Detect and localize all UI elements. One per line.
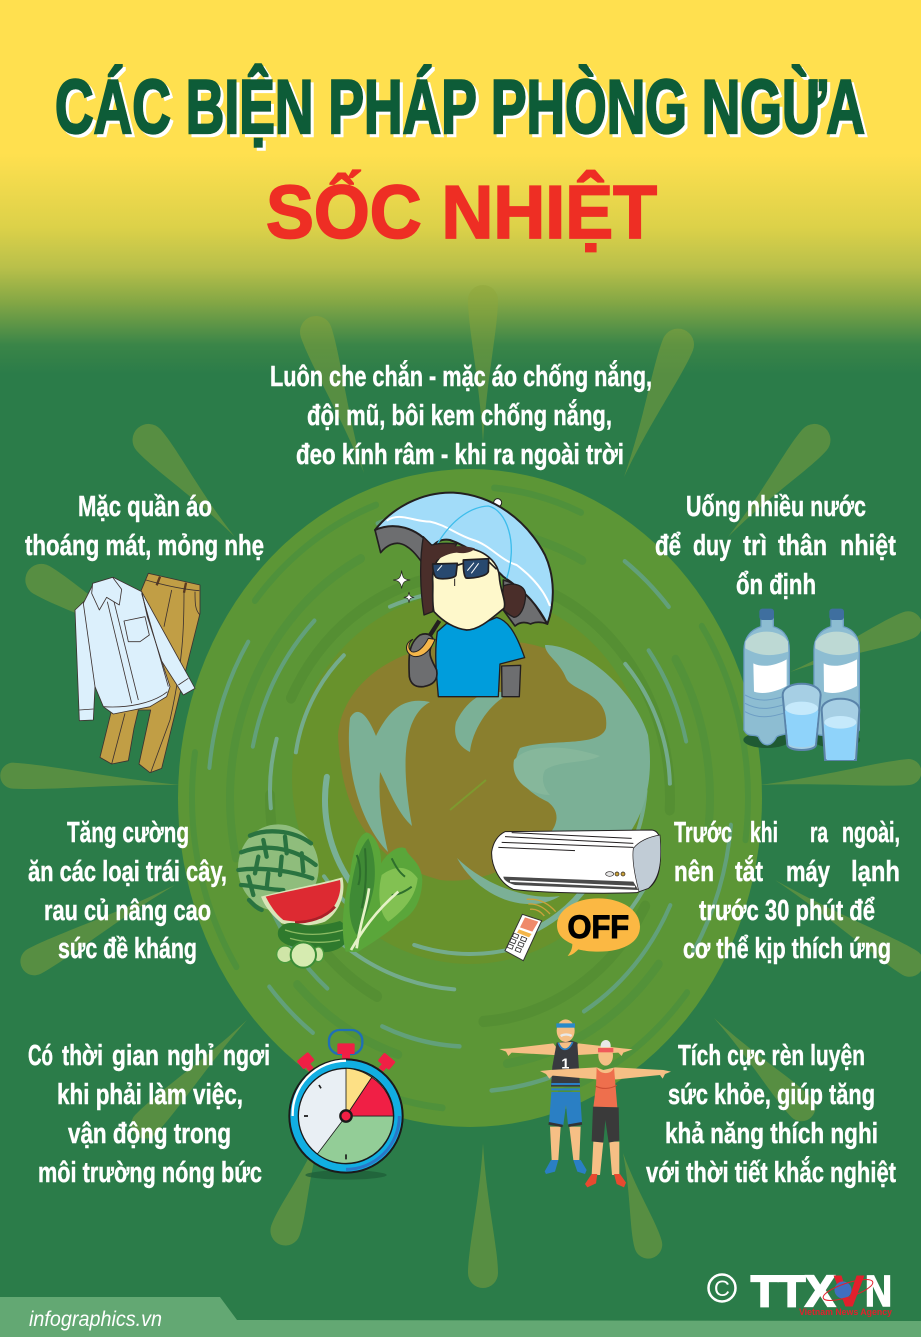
logo: TTXVN: V	[834, 1267, 865, 1316]
logo: TTXVN	[708, 1267, 893, 1318]
man: 1	[561, 1057, 569, 1073]
woman	[540, 1040, 671, 1187]
icon: air conditioner and remote: OFF	[567, 909, 629, 945]
sun rays	[0, 285, 921, 1288]
text: drink water: duy	[693, 530, 731, 562]
text: fruit and vegetables: Tăng cường	[67, 817, 189, 849]
logo: TTXVN: C	[714, 1276, 730, 1301]
text: rest: môi trường nóng bức	[38, 1157, 262, 1189]
logo: TTXVN: Vietnam News Agency	[799, 1307, 893, 1318]
text: drink water: ổn định	[736, 569, 816, 601]
text: fruit and vegetables: sức đề kháng	[58, 933, 197, 965]
text: air conditioner: tắt	[735, 854, 763, 888]
text: air conditioner: nên	[674, 856, 714, 888]
icon: air conditioner and remote	[492, 830, 661, 961]
text: air conditioner: khi	[750, 817, 778, 849]
text: drink water: để	[655, 530, 681, 562]
text: rest: gian	[112, 1040, 159, 1072]
text: drink water: nhiệt	[840, 530, 896, 562]
text: rest	[28, 1040, 270, 1189]
logo: TTXVN: TTX	[751, 1267, 835, 1316]
text: rest: Có	[28, 1040, 53, 1072]
text: rest: khi phải làm việc,	[57, 1079, 243, 1111]
text: air conditioner: máy	[786, 856, 830, 888]
text: rest: nghỉ	[167, 1040, 214, 1072]
text: air conditioner: lạnh	[851, 856, 900, 888]
swirl	[78, 359, 862, 1237]
text: fruit and vegetables	[28, 817, 227, 965]
man	[499, 1019, 633, 1174]
text: sun protection: đội mũ, bôi kem chống nắng,	[307, 398, 612, 432]
icon: water bottles and glasses	[743, 609, 860, 760]
icon: exercising couple	[499, 1019, 671, 1187]
sunglasses	[433, 559, 497, 579]
text: air conditioner	[674, 817, 900, 965]
swirl core	[338, 641, 611, 881]
text: sun protection: đeo kính râm - khi ra ngoài trời	[296, 439, 624, 471]
text: clothing: Mặc quần áo	[78, 491, 212, 523]
icon: fruit and vegetables	[238, 824, 422, 968]
text: rest: thời	[62, 1040, 103, 1072]
text: drink water	[655, 491, 896, 601]
text: clothing	[25, 491, 264, 562]
footer band	[0, 1297, 921, 1337]
icon: stopwatch	[289, 1030, 403, 1180]
text: rest: ngơi	[223, 1040, 270, 1072]
title	[55, 64, 865, 254]
text: rest: vận động trong	[68, 1118, 231, 1150]
text: clothing: thoáng mát, mỏng nhẹ	[25, 530, 264, 562]
text: fruit and vegetables: rau củ nâng cao	[44, 895, 211, 927]
text: drink water: trì	[743, 530, 767, 562]
text: fruit and vegetables: ăn các loại trái cây,	[28, 856, 227, 888]
text: air conditioner: ra	[810, 817, 829, 849]
logo: TTXVN: N	[865, 1267, 892, 1316]
icon: girl with umbrella	[375, 493, 553, 697]
text: exercise	[646, 1040, 896, 1189]
text: air conditioner: Trước	[674, 817, 732, 849]
text: sun protection	[270, 359, 652, 471]
text: sun protection: Luôn che chắn - mặc áo chống nắng,	[270, 359, 652, 393]
icon: clothes	[75, 573, 200, 773]
source label: infographics.vn	[29, 1308, 162, 1331]
text: drink water: thân	[778, 530, 827, 562]
title: SỐC NHIỆT	[266, 170, 657, 254]
